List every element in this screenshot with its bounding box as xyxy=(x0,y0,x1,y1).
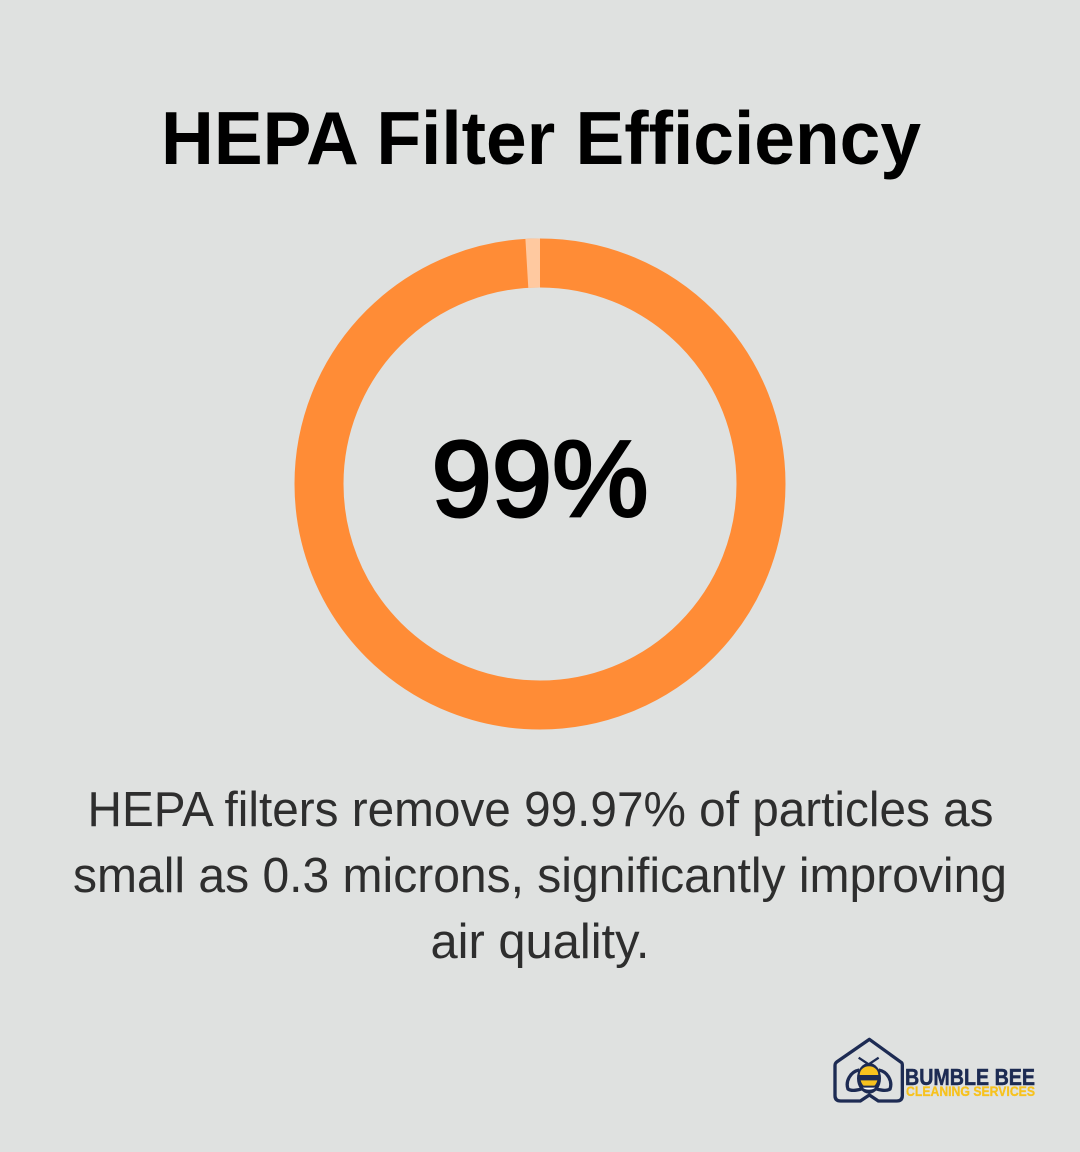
wordmark: BUMBLE BEE xyxy=(905,1064,1035,1090)
tagline: CLEANING SERVICES xyxy=(906,1084,1035,1099)
description text: HEPA filters remove 99.97% of particles as xyxy=(88,783,994,837)
description text xyxy=(73,783,1007,969)
remaining 1% segment xyxy=(525,238,540,288)
donut chart xyxy=(319,238,761,705)
center value: 99% xyxy=(432,418,648,539)
description text: small as 0.3 microns, significantly improving xyxy=(73,849,1007,903)
title: HEPA Filter Efficiency xyxy=(161,96,921,180)
icon: house with bee xyxy=(835,1039,902,1101)
logo: Bumble Bee Cleaning Services xyxy=(835,1039,1035,1101)
description text: air quality. xyxy=(430,915,650,969)
